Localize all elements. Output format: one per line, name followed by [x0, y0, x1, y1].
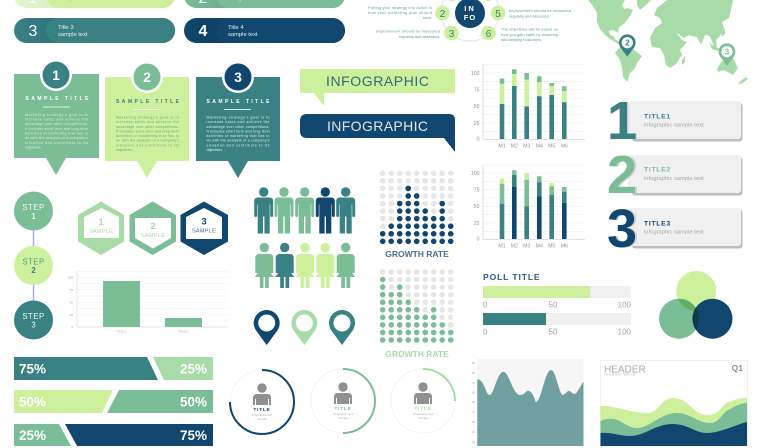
poll: 0: [483, 300, 488, 310]
progress ring 2: infographic text: [333, 412, 353, 416]
stacked bar chart 1: M1: [498, 144, 506, 150]
panel: header layered area chart: INFOGRAPHIC TEMPLATE: [604, 374, 636, 376]
numbered title 2: 2: [607, 145, 637, 205]
bar chart: title 1 and title 2: TITLE 2: [178, 330, 189, 334]
numbered title 1: infographic sample text: [644, 122, 704, 128]
progress ring 3: infographic text: [413, 412, 433, 416]
area chart: 20: [472, 430, 475, 434]
area chart: 90: [472, 361, 475, 365]
panel: header layered area chart: [600, 360, 747, 446]
percent bar row 3: 75%: [180, 428, 207, 443]
step timeline: STEP: [22, 203, 45, 212]
info wheel: regularly and assessed.: [399, 34, 440, 39]
percent bar row 3: [14, 424, 213, 446]
info wheel: IN: [464, 4, 476, 13]
label: growth rate green: GROWTH RATE: [385, 349, 449, 359]
pictogram: men: [254, 187, 355, 234]
pill banner 4: [184, 18, 345, 43]
info wheel: 5: [495, 9, 501, 20]
stacked bar chart 1: 25: [474, 121, 480, 127]
percent bar row 2: 50%: [19, 394, 46, 410]
progress ring 3: [391, 369, 455, 433]
panel: sample card 2: increase sales and achieve the: [116, 120, 179, 124]
panel: header layered area chart: HEADER: [604, 364, 646, 376]
percent bar row 3: 25%: [19, 428, 46, 443]
poll: 100: [618, 300, 632, 310]
hexagon badge 3: [180, 202, 228, 255]
panel: sample card 3: advantage over other competitions.: [206, 125, 270, 129]
stacked bar chart 1: 75: [474, 88, 480, 94]
bar chart: title 1 and title 2: 75: [70, 288, 73, 292]
panel: sample card 3: SAMPLE TITLE: [206, 99, 270, 105]
bar chart: title 1 and title 2: 50: [70, 300, 73, 304]
info wheel: 6: [486, 29, 492, 40]
hexagon badge 1: SAMPLE: [89, 229, 113, 235]
pill banner 3: [14, 18, 175, 43]
info wheel: how you gain sales by acquiring: [501, 32, 558, 37]
panel: header layered area chart: Q1: [732, 363, 743, 373]
info wheel: [368, 0, 571, 42]
hexagon badge 3: 3: [201, 216, 207, 228]
info wheel: work.: [423, 15, 432, 20]
poll: 100: [618, 328, 632, 336]
panel: sample card 3: Marketing strategy's goal is to: [206, 116, 270, 120]
stacked bar chart 1: M5: [548, 144, 555, 150]
numbered title 3: TITLE3: [644, 220, 671, 228]
icon: map pin 2: 2: [625, 39, 630, 48]
stacked bar chart 1: 0: [477, 136, 480, 142]
pill banner 2: [184, 0, 345, 8]
progress ring 2: TITLE: [334, 406, 352, 412]
pill banner 4: Title 4: [228, 25, 244, 31]
stacked bar chart 1: M2: [511, 144, 518, 150]
icon: location pins: [254, 310, 355, 345]
info wheel: FO: [464, 13, 476, 22]
poll: 50: [549, 328, 558, 336]
hexagon badge 2: 2: [150, 221, 156, 232]
stacked bar chart 1: 50: [474, 104, 480, 110]
hexagon badge 1: [78, 202, 124, 255]
dot chart: growth rate navy: [383, 170, 451, 241]
panel: sample card 1: SAMPLE TITLE: [26, 96, 89, 102]
pill banner 3: 3: [29, 23, 38, 40]
area chart: 60: [472, 390, 475, 394]
panel: sample card 1: objectives.: [25, 145, 42, 149]
panel: sample card 1: do with the analysis of a company's: [25, 136, 88, 140]
pill banner 4: 4: [199, 23, 208, 40]
panel: sample card 2: do with the analysis of a company's: [116, 139, 179, 143]
panel: sample card 1: increase sales and achieve the: [25, 118, 88, 122]
step timeline: 1: [31, 212, 36, 221]
pill banner 4: sample text: [228, 32, 258, 38]
stacked bar chart 1: [471, 64, 585, 150]
panel: sample card 2: It includes short term and long term: [116, 129, 179, 133]
percent bar row 1: 75%: [19, 362, 46, 376]
poll: 50: [549, 300, 558, 310]
stacked bar chart 1: M6: [561, 144, 568, 150]
panel: sample card 3: activities of marketing that has to: [206, 134, 270, 138]
stacked bar chart 2: M5: [548, 244, 555, 250]
progress ring 3: TITLE: [414, 406, 432, 412]
banner: infographic navy: [300, 114, 455, 152]
panel: sample card 2: activities of marketing that has to: [116, 134, 179, 138]
progress ring 1: infographic text: [252, 413, 272, 417]
pill banner 3: Title 3: [58, 25, 74, 31]
stacked bar chart 2: 0: [477, 236, 480, 242]
stacked bar chart 2: 100: [471, 171, 480, 177]
icon: map pin 3: [719, 43, 735, 66]
numbered title 1: 1: [608, 91, 639, 151]
numbered title 1: TITLE1: [644, 114, 671, 120]
stacked bar chart 2: 75: [474, 188, 480, 194]
poll: 0: [483, 328, 488, 336]
panel: sample card 1: It includes short term and long term: [25, 127, 88, 131]
stacked bar chart 2: M4: [536, 244, 543, 250]
panel: sample card 1: Marketing strategy's goal is to: [25, 113, 88, 117]
percent bar row 1: [14, 357, 213, 380]
icon: map pin 3: 3: [725, 48, 730, 57]
bar chart: title 1 and title 2: [68, 271, 228, 334]
panel: sample card 1: situation and contribute to its: [25, 141, 88, 145]
step timeline: [14, 192, 53, 340]
panel: sample card 2: Marketing strategy's goal is to: [116, 116, 179, 120]
stacked bar chart 1: M3: [523, 144, 530, 150]
numbered title 2: [607, 145, 742, 205]
panel: sample card 3: It includes short term and long term: [206, 129, 270, 133]
panel: sample card 1: [14, 59, 99, 175]
area chart: 80: [472, 371, 475, 375]
numbered title 2: infographic sample text: [644, 176, 704, 182]
area chart: 50: [472, 400, 475, 404]
percent bar row 1: 25%: [180, 362, 207, 376]
info wheel: Improvement should be measured: [509, 8, 571, 13]
stacked bar chart 2: M1: [498, 244, 506, 250]
hexagon badge 2: SAMPLE: [141, 233, 165, 239]
info wheel: 3: [449, 29, 455, 40]
venn diagram: [659, 271, 732, 339]
stacked bar chart 2: M6: [561, 244, 568, 250]
panel: sample card 2: objectives.: [116, 148, 133, 152]
info wheel: how your marketing plan should: [368, 10, 432, 15]
stacked bar chart 2: 50: [474, 204, 480, 210]
poll: [483, 272, 632, 336]
panel: sample card 3: [196, 61, 280, 178]
panel: sample card 2: situation and contribute to its: [116, 143, 179, 147]
panel: sample card 1: activities of marketing that has to: [25, 132, 88, 136]
hexagon badge 2: [130, 202, 176, 255]
hexagon badge 1: 1: [98, 217, 104, 228]
panel: sample card 3: situation and contribute to its: [206, 143, 270, 147]
panel: sample card 2: SAMPLE TITLE: [116, 99, 180, 105]
step timeline: STEP: [22, 312, 45, 321]
info wheel: and keeping customers.: [501, 37, 542, 42]
panel: sample card 3: 3: [234, 69, 242, 85]
pill banner 3: sample text: [58, 32, 88, 38]
info wheel: regularly and assessed.: [509, 14, 550, 18]
bar chart: title 1 and title 2: 100: [68, 276, 73, 280]
percent bar row 2: [14, 390, 213, 413]
numbered title 2: TITLE2: [644, 166, 671, 174]
area chart: 10: [472, 440, 475, 444]
bar chart: title 1 and title 2: 25: [70, 313, 73, 317]
icon: map pin 2: [619, 34, 636, 57]
progress ring 1: [230, 370, 294, 434]
numbered title 3: [607, 199, 742, 259]
bar chart: title 1 and title 2: 0: [71, 325, 73, 329]
banner: infographic light: [300, 69, 455, 106]
step timeline: 3: [31, 320, 36, 330]
pictogram: women: [255, 243, 355, 288]
world map: [588, 0, 748, 84]
area chart: 40: [472, 410, 475, 414]
numbered title 3: infographic sample text: [644, 230, 704, 236]
step timeline: 2: [31, 266, 36, 275]
poll: POLL TITLE: [483, 272, 540, 282]
dot chart: growth rate green: [383, 270, 451, 340]
info wheel: 2: [440, 9, 446, 20]
bar chart: title 1 and title 2: TITLE 1: [116, 330, 127, 334]
step timeline: STEP: [22, 258, 45, 266]
numbered title 3: 3: [607, 199, 637, 259]
info wheel: The objectives will be based on: [501, 26, 558, 32]
area chart: 30: [472, 420, 475, 424]
stacked bar chart 2: M2: [511, 244, 518, 250]
panel: sample card 1: advantage over other competitions.: [25, 122, 88, 126]
stacked bar chart 1: 100: [471, 71, 480, 77]
banner: infographic navy: INFOGRAPHIC: [327, 118, 428, 134]
numbered title 2: 2: [609, 145, 639, 205]
progress ring 2: sample: [338, 416, 348, 420]
info wheel: Improvement should be measured: [376, 28, 440, 34]
panel: sample card 3: increase sales and achieve the: [206, 120, 270, 124]
panel: sample card 3: objectives.: [206, 148, 223, 152]
hexagon badge 3: SAMPLE: [192, 228, 216, 234]
panel: sample card 2: 2: [143, 69, 151, 85]
panel: sample card 2: [105, 61, 189, 178]
info wheel: Putting your strategy into action is: [368, 5, 432, 10]
stacked bar chart 2: M3: [523, 244, 530, 250]
area chart: 70: [472, 381, 475, 385]
progress ring 3: sample: [418, 416, 428, 420]
stacked bar chart 2: 25: [474, 221, 480, 227]
panel: sample card 3: do with the analysis of a company's: [206, 139, 270, 143]
label: growth rate navy: GROWTH RATE: [385, 249, 449, 259]
progress ring 1: TITLE: [253, 407, 271, 413]
area chart: [472, 359, 584, 446]
numbered title 3: 3: [609, 199, 639, 259]
banner: infographic light: INFOGRAPHIC: [326, 73, 429, 89]
progress ring 2: [311, 369, 375, 433]
stacked bar chart 2: [471, 165, 585, 250]
numbered title 1: [607, 91, 742, 151]
numbered title 1: 1: [607, 91, 637, 151]
progress ring 1: sample: [257, 417, 267, 421]
panel: sample card 1: 1: [52, 67, 60, 83]
panel: sample card 2: advantage over other competitions.: [116, 125, 179, 129]
pill banner 1: [14, 0, 175, 8]
percent bar row 2: 50%: [180, 394, 207, 410]
stacked bar chart 1: M4: [536, 144, 543, 150]
